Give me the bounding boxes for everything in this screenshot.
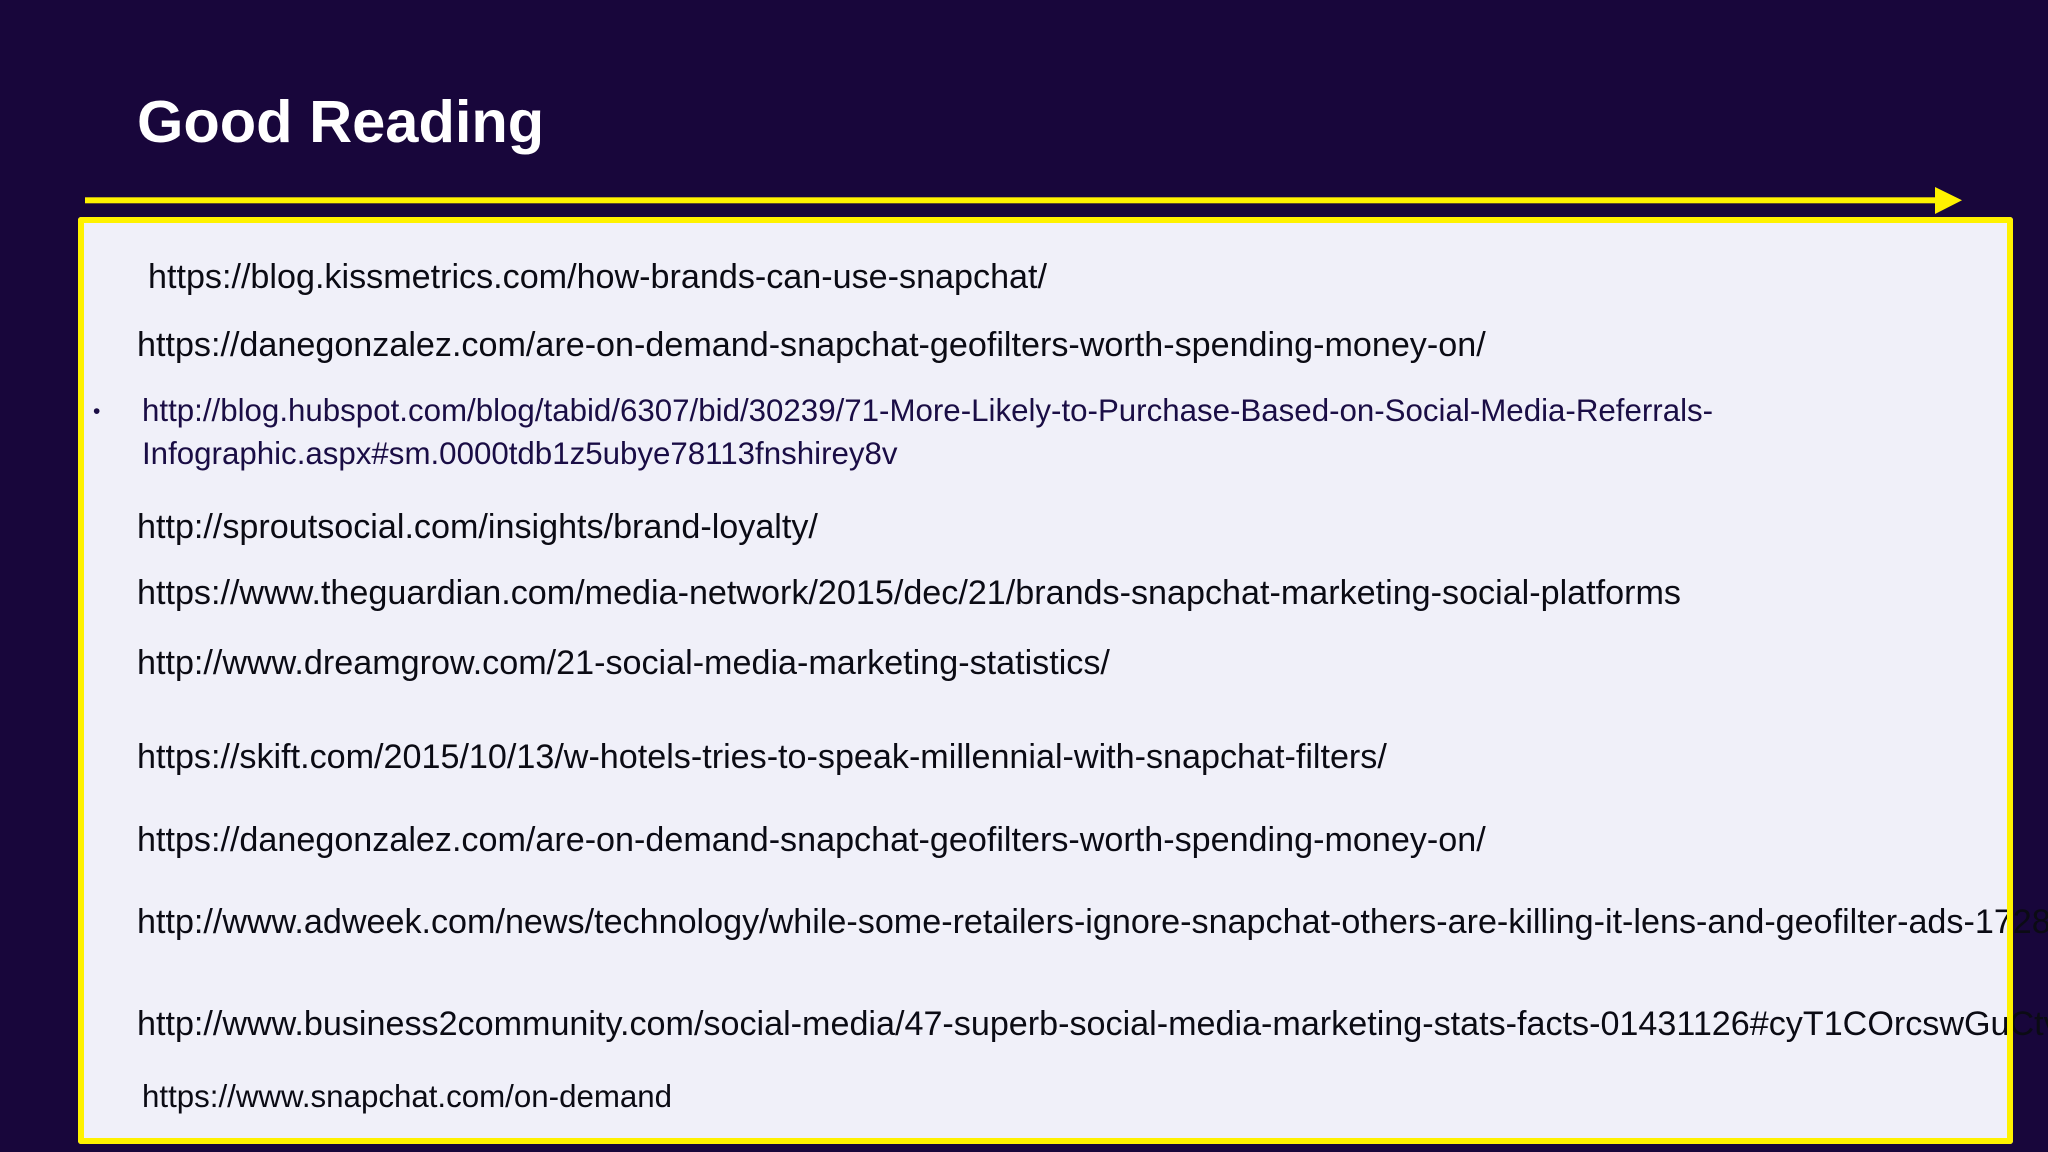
link 11: https://www.snapchat.com/on-demand (142, 1079, 672, 1114)
link 9: http://www.adweek.com/news/technology/while-some-retailers-ignore-snapchat-others-are-killing-it-lens-and-geofilter-ads-1728 (137, 903, 2048, 941)
link 1: https://blog.kissmetrics.com/how-brands-can-use-snapchat/ (148, 258, 1047, 296)
panel border (78, 217, 2013, 1144)
title: Good Reading (137, 88, 544, 155)
link 5: https://www.theguardian.com/media-network/2015/dec/21/brands-snapchat-marketing-social-platforms (137, 574, 1681, 612)
link 7: https://skift.com/2015/10/13/w-hotels-tries-to-speak-millennial-with-snapchat-filters/ (137, 738, 1387, 776)
arrow (85, 187, 1962, 214)
bullet: • (93, 400, 100, 423)
link 8: https://danegonzalez.com/are-on-demand-snapchat-geofilters-worth-spending-money-on/ (137, 821, 1486, 859)
link 10: http://www.business2community.com/social-media/47-superb-social-media-marketing-stats-facts-01431126#cyT1COrcswGuCtv (137, 1005, 2048, 1043)
link 2: https://danegonzalez.com/are-on-demand-snapchat-geofilters-worth-spending-money-on/ (137, 326, 1486, 364)
link 6: http://www.dreamgrow.com/21-social-media-marketing-statistics/ (137, 644, 1110, 682)
link 4: http://sproutsocial.com/insights/brand-loyalty/ (137, 508, 818, 546)
link 3 continued: Infographic.aspx#sm.0000tdb1z5ubye78113fnshirey8v (142, 436, 898, 471)
panel: reading list background (78, 217, 2013, 1144)
link 3: http://blog.hubspot.com/blog/tabid/6307/bid/30239/71-More-Likely-to-Purchase-Based-on-Social-Media-Referrals- (142, 393, 1713, 428)
